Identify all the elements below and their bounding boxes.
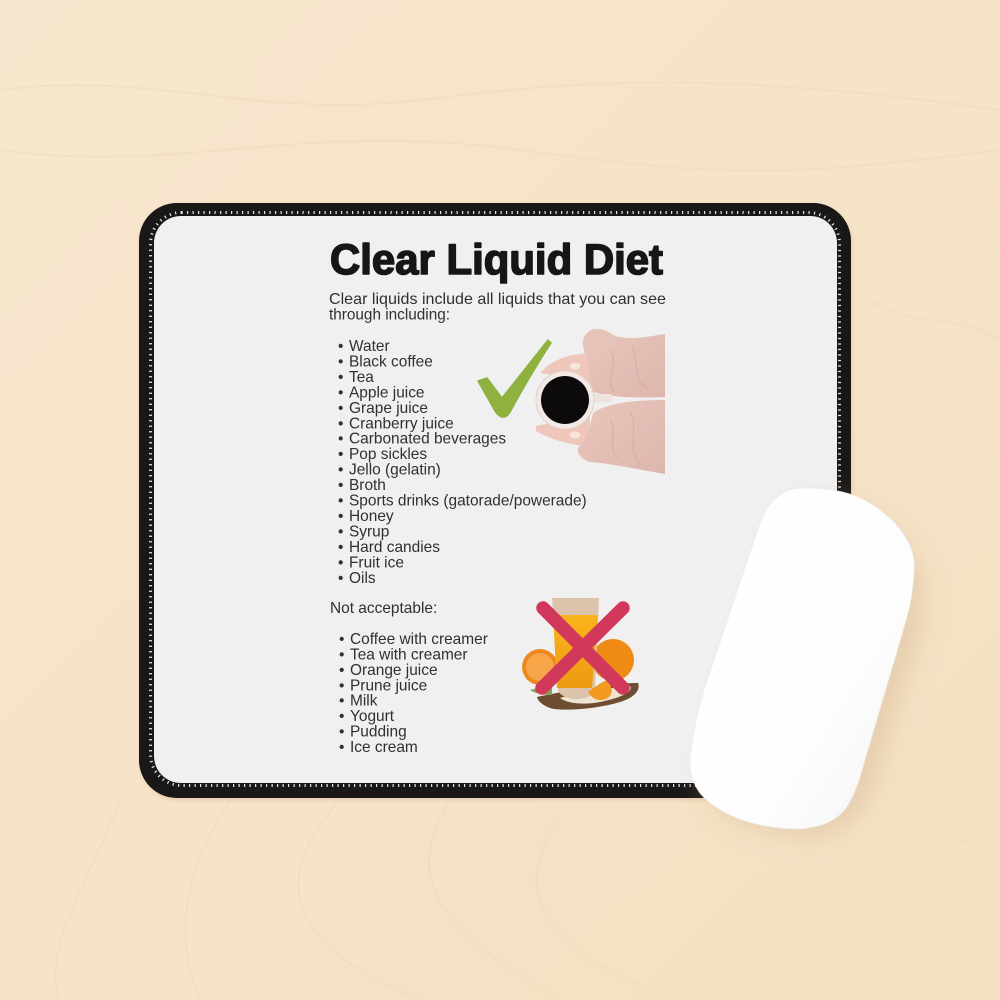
intro text <box>329 291 666 324</box>
list: acceptable clear liquids: Hard candies <box>349 539 440 556</box>
cross <box>542 608 623 688</box>
not acceptable heading: Not acceptable: <box>330 600 437 617</box>
lower sleeve <box>578 400 665 474</box>
list: not acceptable: Orange juice <box>350 662 438 679</box>
list: acceptable clear liquids: • <box>338 431 343 448</box>
image: orange juice with red cross <box>522 598 639 710</box>
pad printed surface <box>154 216 837 783</box>
list: acceptable clear liquids: Oils <box>349 570 376 587</box>
list: not acceptable: • <box>339 646 344 663</box>
list: acceptable clear liquids: • <box>338 369 343 386</box>
juice <box>553 615 598 688</box>
lower fingernail <box>570 432 580 438</box>
list: acceptable clear liquids: Broth <box>349 477 386 494</box>
list: acceptable clear liquids: Syrup <box>349 523 389 540</box>
image: hands holding black coffee <box>536 329 665 474</box>
list: not acceptable: Pudding <box>350 724 407 741</box>
list: acceptable clear liquids: Fruit ice <box>349 554 404 571</box>
list: acceptable clear liquids: • <box>338 338 343 355</box>
list: acceptable clear liquids <box>338 338 587 587</box>
pad shadow <box>140 205 852 800</box>
list: acceptable clear liquids: • <box>338 462 343 479</box>
lower hand <box>536 416 590 446</box>
coffee <box>541 376 589 424</box>
cup rim <box>536 371 594 429</box>
list: not acceptable: • <box>339 739 344 756</box>
list: acceptable clear liquids: • <box>338 554 343 571</box>
orange wedge <box>588 680 612 700</box>
list: acceptable clear liquids: • <box>338 415 343 432</box>
leaf <box>530 684 552 695</box>
list: acceptable clear liquids: • <box>338 384 343 401</box>
list: not acceptable: • <box>339 708 344 725</box>
list: not acceptable: Yogurt <box>350 708 395 725</box>
list: not acceptable: • <box>339 677 344 694</box>
icon: green check mark <box>478 340 551 417</box>
list: acceptable clear liquids: Tea <box>349 369 374 386</box>
wood slice <box>537 683 639 710</box>
list: not acceptable: • <box>339 724 344 741</box>
pad stitched border <box>139 203 851 798</box>
list: acceptable clear liquids: • <box>338 353 343 370</box>
list: acceptable clear liquids: Water <box>349 338 390 355</box>
mouse shadow <box>702 497 925 839</box>
title: Clear Liquid Diet <box>330 236 663 284</box>
list: acceptable clear liquids: Jello (gelatin) <box>349 462 441 479</box>
list: not acceptable: Milk <box>350 693 378 710</box>
list: acceptable clear liquids: Black coffee <box>349 353 433 370</box>
list: not acceptable: • <box>339 693 344 710</box>
list: acceptable clear liquids: • <box>338 477 343 494</box>
list: acceptable clear liquids: • <box>338 446 343 463</box>
list: not acceptable: Ice cream <box>350 739 418 756</box>
list: acceptable clear liquids: Cranberry juice <box>349 415 454 432</box>
list: acceptable clear liquids: • <box>338 400 343 417</box>
list: not acceptable: Tea with creamer <box>350 646 468 663</box>
mouse <box>690 488 925 839</box>
list: not acceptable: • <box>339 662 344 679</box>
list: acceptable clear liquids: Apple juice <box>349 384 425 401</box>
list: acceptable clear liquids: • <box>338 492 343 510</box>
list: not acceptable: • <box>339 631 344 648</box>
intro text: Clear liquids include all liquids that you can see <box>329 291 666 308</box>
list: acceptable clear liquids: Sports drinks (gatorade/powerade) <box>349 492 587 510</box>
list: acceptable clear liquids: Honey <box>349 508 394 525</box>
mouse body <box>690 488 914 829</box>
upper fingernail <box>570 362 580 370</box>
list: acceptable clear liquids: • <box>338 570 343 587</box>
list: not acceptable <box>339 631 488 756</box>
cup handle <box>590 394 613 402</box>
list: acceptable clear liquids: Grape juice <box>349 400 428 417</box>
list: acceptable clear liquids: • <box>338 539 343 556</box>
orange half <box>522 649 558 685</box>
list: not acceptable: Prune juice <box>350 677 427 694</box>
upper hand <box>540 353 592 384</box>
intro text: through including: <box>329 306 450 324</box>
list: acceptable clear liquids: • <box>338 523 343 540</box>
glass <box>552 598 599 699</box>
list: acceptable clear liquids: Pop sickles <box>349 446 427 463</box>
mouse pad <box>139 203 852 800</box>
upper sleeve <box>583 329 665 397</box>
list: acceptable clear liquids: Carbonated beverages <box>349 431 506 448</box>
list: not acceptable: Coffee with creamer <box>350 631 488 648</box>
whole orange <box>592 639 634 681</box>
list: acceptable clear liquids: • <box>338 508 343 525</box>
